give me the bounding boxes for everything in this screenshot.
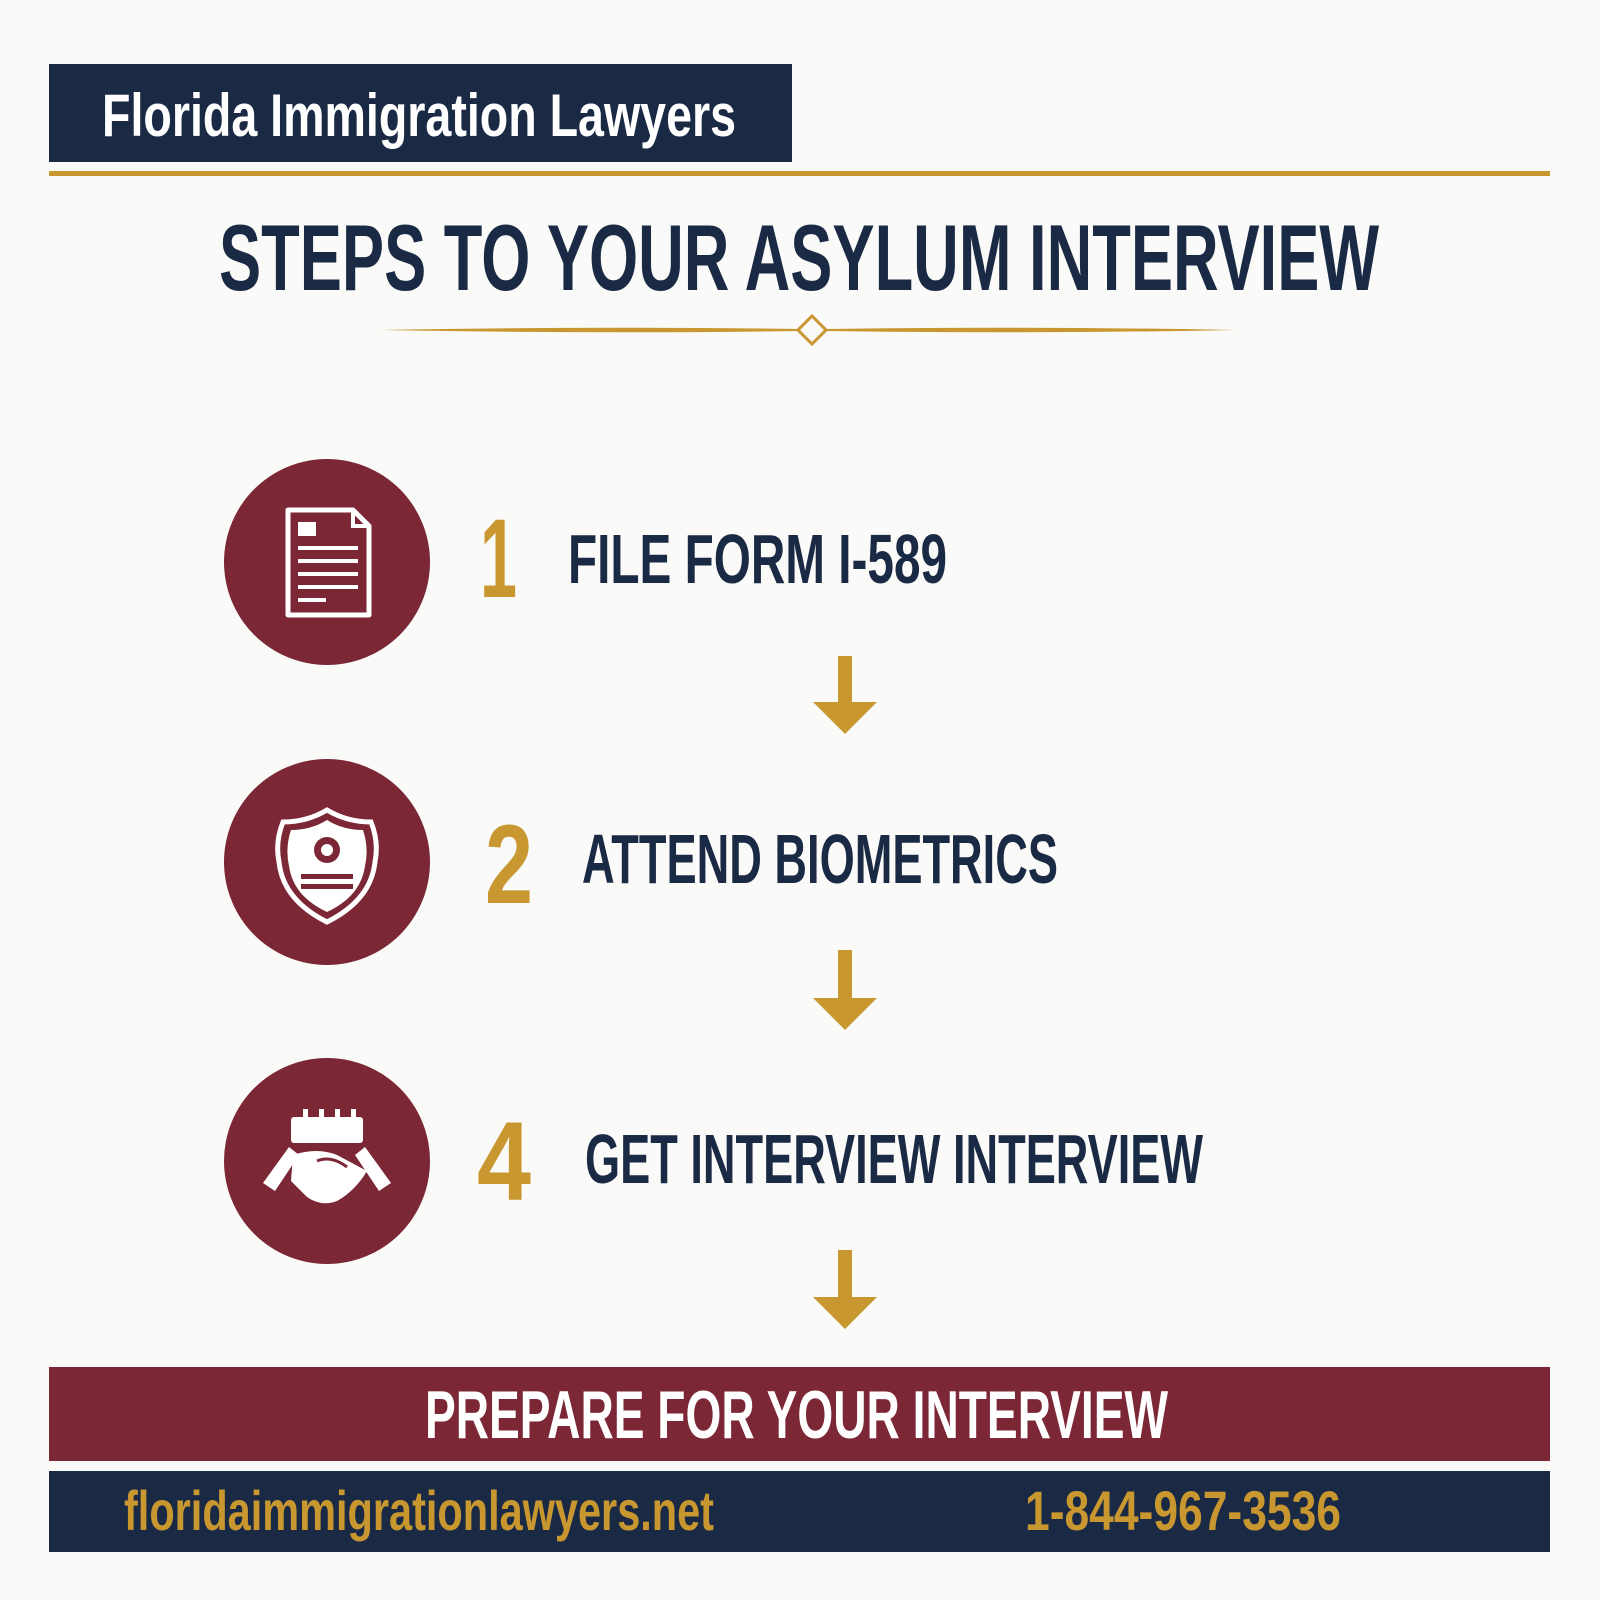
step 1: 1 [480,496,517,621]
step 3 [224,1058,1203,1264]
divider ornament [379,316,1236,344]
footer: contact [49,1471,1550,1552]
step 3: GET INTERVIEW INTERVIEW [585,1120,1203,1198]
header: firm name [49,64,792,162]
step 1 [224,459,947,665]
banner: prepare: PREPARE FOR YOUR INTERVIEW [425,1377,1169,1453]
footer: contact: 1-844-967-3536 [1025,1479,1341,1542]
step 2: 2 [485,802,533,927]
arrow 2 [813,950,877,1030]
icon: badge [224,759,430,965]
step 2: ATTEND BIOMETRICS [582,820,1058,898]
arrow 1 [813,656,877,734]
step 2 [224,759,1058,965]
banner: prepare [49,1367,1550,1461]
step 3: 4 [477,1099,531,1224]
footer: contact: floridaimmigrationlawyers.net [124,1479,714,1542]
step 1: FILE FORM I-589 [568,520,947,598]
icon: document [224,459,430,665]
icon: handshake calendar [224,1058,430,1264]
header: firm name: Florida Immigration Lawyers [102,82,736,149]
arrow 3 [813,1250,877,1329]
